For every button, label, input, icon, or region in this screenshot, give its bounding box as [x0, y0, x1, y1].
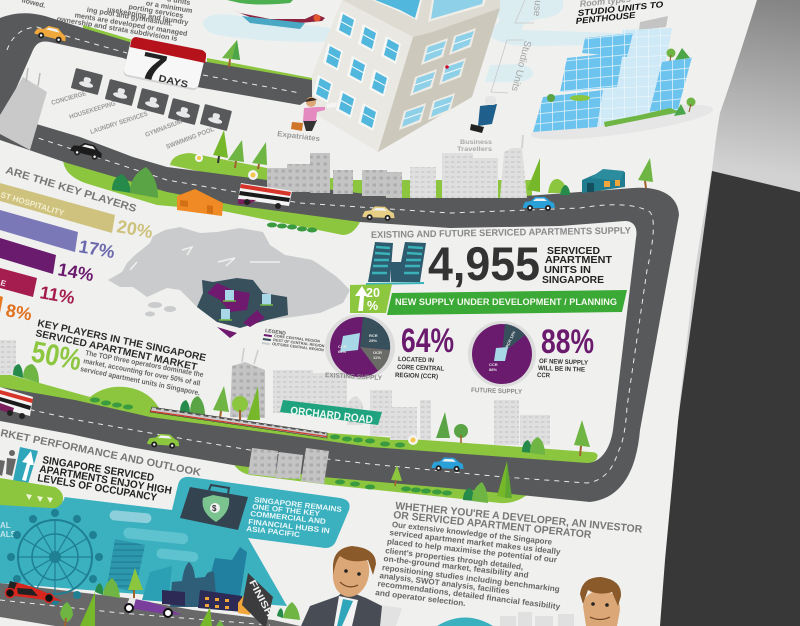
label: existing supply: EXISTING SUPPLY [325, 372, 383, 382]
trees mid [13, 364, 590, 456]
pie: future supply [468, 321, 536, 387]
service labels: LAUNDRY SERVICES [89, 111, 149, 136]
scalloped hedges [90, 222, 452, 496]
pale clouds behind tower [203, 0, 627, 82]
caption: 64%: LOCATED IN [398, 356, 434, 364]
occupancy headline: APARTMENTS ENJOY HIGH [39, 463, 173, 497]
bushes [112, 167, 158, 198]
mid skyline [0, 340, 550, 445]
intro text: ments are developed or managed [74, 10, 188, 38]
bar 11% [0, 268, 76, 308]
bar 17% [0, 210, 116, 262]
stat: 4,955: 4,955 [428, 237, 540, 290]
developer paragraph: client's properties through detailed, [385, 546, 524, 572]
bar 20%: ST HOSPITALITY [0, 190, 66, 218]
pie: future supply: RCR 12% [504, 330, 517, 348]
stat caption: APARTMENT [545, 254, 613, 266]
service labels: SWIMMING POOL [165, 126, 215, 151]
developer heading: OR SERVICED APARTMENT OPERATOR [393, 509, 592, 541]
intro text: ing pool and gymnasium. [86, 5, 173, 28]
developer paragraph: recommendations, detailed financial feasibility [377, 579, 561, 611]
red car [5, 581, 62, 602]
map legend [262, 328, 325, 352]
occupancy headline [37, 454, 173, 504]
caption: 88%: CCR [537, 372, 550, 379]
teal circle [437, 618, 493, 626]
stat caption: UNITS IN [544, 264, 591, 276]
developer paragraph: analysis, SWOT analysis, facilities [379, 571, 511, 596]
developer paragraph: serviced apartment market makes us ideally [389, 528, 562, 557]
purple car [125, 597, 182, 617]
new supply banner: NEW SUPPLY UNDER DEVELOPMENT / PLANNING [395, 297, 617, 307]
pie: future supply: 88% [489, 367, 497, 372]
trees lower road [391, 461, 512, 503]
supply heading: EXISTING AND FUTURE SERVICED APARTMENTS SUPPLY [371, 225, 632, 241]
orange house [177, 189, 223, 216]
caption: 64%: CORE CENTRAL [397, 364, 444, 373]
pie: existing supply [325, 314, 395, 380]
dragon boats [227, 0, 325, 29]
racing cars [5, 581, 182, 617]
service labels [51, 90, 215, 151]
key players paragraph: The TOP three operators dominate the [85, 348, 204, 379]
finish post [242, 573, 275, 626]
label: business travellers [457, 139, 492, 153]
heading: key players in the Singapore market: SERVICED APARTMENT MARKET [34, 328, 198, 373]
room types text: STUDIO UNITS TO [577, 0, 664, 18]
icon: briefcase [180, 485, 248, 530]
callout text: financial hub: ONE OF THE KEY [252, 502, 320, 518]
pie: existing supply: CCR [338, 344, 347, 349]
bottom pale skyline [370, 604, 574, 626]
developer heading: WHETHER YOU'RE A DEVELOPER, AN INVESTOR [395, 500, 643, 536]
finish post: FINISH [246, 578, 275, 619]
map legend: CORE CENTRAL REGION [274, 334, 320, 344]
foreground trees [60, 568, 300, 626]
callout text: financial hub: SINGAPORE REMAINS [254, 495, 342, 514]
bar 8%: 8% [4, 300, 33, 324]
occupancy headline: LEVELS OF OCCUPANCY [37, 472, 158, 504]
pie: existing supply: RCR [369, 333, 378, 338]
teal panel and city [0, 477, 350, 615]
label: business travellers: Travellers [457, 146, 492, 153]
pie: existing supply: 25% [369, 338, 377, 343]
map of Singapore [108, 227, 350, 338]
callout text: financial hub: COMMERCIAL AND [250, 509, 327, 526]
developer paragraph: Our extensive knowledge of the Singapore [391, 520, 553, 547]
developer paragraph: repositioning studies including benchmarking [381, 563, 560, 594]
main winding road [0, 115, 679, 502]
key players paragraph [80, 348, 204, 397]
grey tower left [0, 68, 47, 150]
new supply banner: 20 [366, 286, 380, 300]
stat caption: SERVICED [547, 245, 600, 257]
glass tower [529, 16, 715, 147]
road sign: Orchard Road: ORCHARD ROAD [290, 405, 374, 426]
stat: 50%: 50% [29, 335, 84, 377]
intro text [21, 0, 193, 43]
key players paragraph: market, accounting for over 50% of all [83, 356, 201, 388]
vehicles [34, 23, 555, 472]
heading: key players in the Singapore market: KEY PLAYERS IN THE SINGAPORE [36, 318, 207, 364]
calendar: 7 days: DAYS [157, 73, 189, 91]
trees right of skyline [527, 158, 653, 195]
figure: second advisor [580, 577, 621, 626]
bar 20%: 20% [115, 216, 154, 242]
caption: 64% [395, 356, 444, 380]
intro text: usekeeping and laundry [107, 5, 189, 27]
bar 14% [0, 238, 95, 285]
finish road [0, 583, 300, 626]
label fragment: AL [0, 521, 11, 530]
occupancy headline: SINGAPORE SERVICED [42, 454, 155, 484]
main serviced apartment building [312, 0, 500, 152]
trees row [195, 40, 267, 180]
caption: 88%: OF NEW SUPPLY [539, 358, 589, 367]
figure: business traveller [470, 96, 497, 133]
intro text: ownership and strata subdivision is [56, 14, 178, 43]
calendar: 7 days [123, 36, 206, 91]
service icons [71, 68, 232, 131]
stat: 88%: 88% [541, 323, 594, 361]
figure: expatriate [291, 97, 337, 131]
section heading: key players: ARE THE KEY PLAYERS [4, 164, 138, 215]
callout text: financial hub: ASIA PACIFIC [246, 524, 301, 539]
callout text: financial hub [246, 495, 342, 539]
label fragment: ALS [0, 530, 17, 539]
green verges [0, 25, 598, 503]
room types text [575, 0, 664, 26]
stat caption: SINGAPORE [542, 274, 604, 286]
developer paragraph: on-the-ground market, feasibility and [383, 554, 529, 580]
bar chart: key players [0, 183, 154, 324]
top road [0, 13, 330, 125]
bar 20% [0, 183, 154, 242]
map legend: REST OF CENTRAL REGION [273, 338, 325, 348]
service labels: CONCIERGE [51, 90, 88, 107]
room types text: PENTHOUSE [575, 10, 636, 26]
label: expatriates: Expatriates [277, 129, 321, 143]
left double-decker bus [0, 387, 33, 419]
figure: man in suit [301, 546, 382, 626]
stat caption [542, 245, 613, 286]
callout text: financial hub: FINANCIAL HUBS IN [248, 517, 330, 535]
pie: future supply: CCR [489, 362, 498, 367]
label: future supply: FUTURE SUPPLY [471, 387, 523, 396]
stat: 64%: 64% [401, 322, 454, 360]
pie: existing supply: 64% [338, 349, 346, 354]
city blocks [107, 539, 250, 615]
pie: existing supply: 11% [373, 355, 381, 360]
bar 17%: 17% [77, 236, 116, 262]
lower grey buildings [248, 448, 329, 484]
bar 11%: 11% [38, 282, 76, 308]
bar 14%: 14% [56, 259, 95, 285]
caption: 88% [537, 358, 589, 379]
room size labels: Studio Units [509, 39, 533, 92]
caption: 88%: WILL BE IN THE [538, 365, 586, 374]
caption: 64%: REGION (CCR) [395, 372, 438, 380]
map legend: OUTSIDE CENTRAL REGION [272, 342, 324, 352]
teal house [582, 169, 625, 193]
map legend: LEGEND [265, 328, 287, 337]
new supply banner [350, 284, 627, 315]
intro text: porting services [128, 2, 184, 20]
room size labels [491, 0, 543, 93]
section heading: market performance: RKET PERFORMANCE AND OUTLOOK [0, 427, 202, 479]
MRT train [150, 407, 327, 438]
calendar: 7 days: 7 [136, 44, 171, 91]
developer paragraph: placed to help maximise the potential of our [386, 537, 557, 564]
label fragment [0, 521, 17, 539]
service labels: HOUSEKEEPING [69, 100, 116, 121]
new supply banner: % [367, 299, 378, 313]
skyline top [267, 135, 527, 198]
flower by the road [408, 435, 418, 445]
developer paragraph: and operator selection. [375, 588, 466, 608]
icon: briefcase: $ [212, 504, 217, 513]
room size labels: use [531, 0, 543, 17]
label: business travellers: Business [460, 139, 492, 146]
pie: existing supply: OCR [373, 350, 382, 355]
icon: occupancy arrow [0, 447, 38, 484]
ferris wheel [7, 509, 103, 605]
service labels: GYMNASIUM [144, 118, 183, 139]
developer paragraph [375, 520, 562, 611]
icon: apartment towers [366, 242, 426, 284]
double-decker bus [238, 183, 292, 209]
key players paragraph: serviced apartment units in Singapore. [80, 364, 201, 397]
